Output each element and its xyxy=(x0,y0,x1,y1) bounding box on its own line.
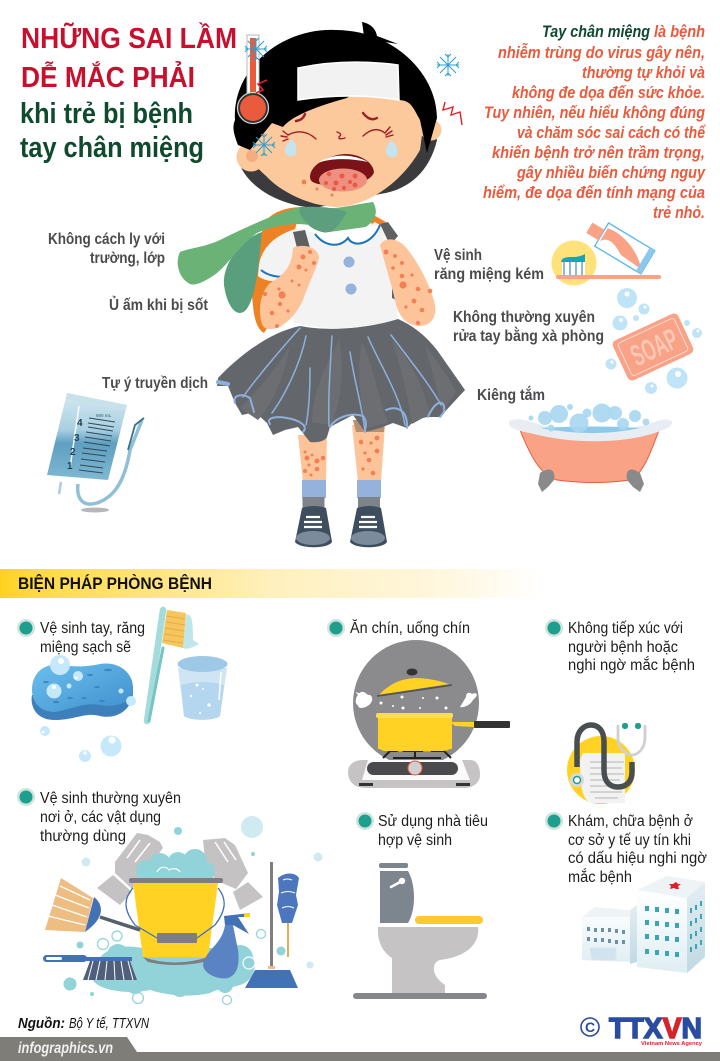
title xyxy=(20,21,237,164)
bullet text: cooked food: Ăn chín, uống chín xyxy=(350,620,470,637)
scarf tail xyxy=(224,232,262,313)
right ear xyxy=(420,120,442,140)
leg rash spots xyxy=(303,436,379,476)
intro paragraph: Tay chân miệng xyxy=(542,23,650,41)
bullet text: toilet xyxy=(356,812,488,849)
arm rash spots xyxy=(263,250,432,328)
bucket xyxy=(133,883,218,957)
TTXVN logo: Vietnam News Agency xyxy=(641,1041,703,1047)
intro paragraph: là bệnh xyxy=(654,23,705,41)
icon: stethoscope and record xyxy=(567,723,645,804)
shirt buttons xyxy=(344,256,356,294)
icon: water glass xyxy=(178,656,228,720)
bullet text: avoid contact: người bệnh hoặc xyxy=(568,639,678,656)
icon: cooking pot on stove xyxy=(348,640,510,788)
skirt xyxy=(217,319,465,442)
footer bar: infographics.vn xyxy=(18,1040,113,1057)
bullet text: cleaning: Vệ sinh thường xuyên xyxy=(40,790,181,807)
icon: IV drip bag: 3 xyxy=(74,433,80,444)
intro paragraph: trẻ nhỏ. xyxy=(653,204,705,222)
mistake labels right xyxy=(434,247,604,404)
icon: IV drip bag: 2 xyxy=(70,447,76,458)
bullet text: cleaning xyxy=(17,788,181,845)
bullet text: cleaning: nơi ở, các vật dụng xyxy=(40,809,161,826)
icon: IV drip bag: 1 xyxy=(67,461,73,472)
bullet text: medical care: Khám, chữa bệnh ở xyxy=(568,813,693,830)
icon: IV drip bag: 500 mL xyxy=(96,413,112,418)
foam highlights xyxy=(157,867,180,872)
mistake labels left: Ủ ấm khi bị sốt xyxy=(109,296,208,314)
bullet text: hygiene: miệng sạch sẽ xyxy=(40,639,131,656)
socks xyxy=(302,480,381,511)
skirt pleats and hem xyxy=(218,328,444,432)
mistake labels left: trường, lớp xyxy=(90,250,165,267)
shirt xyxy=(258,222,410,328)
footer bar xyxy=(0,1037,720,1061)
mistake labels right: Vệ sinh xyxy=(434,247,482,264)
bullet text: toilet: Sử dụng nhà tiêu xyxy=(378,813,488,830)
tears xyxy=(285,139,398,157)
TTXVN logo: TTXVN xyxy=(609,1013,702,1045)
mistake labels left: Không cách ly với xyxy=(48,231,165,248)
source note: Nguồn: xyxy=(18,1015,65,1032)
title: DỄ MẮC PHẢI xyxy=(21,60,195,94)
bullet text: toilet: hợp vệ sinh xyxy=(378,832,452,849)
broom xyxy=(45,878,140,932)
bucket rim and base xyxy=(129,878,223,965)
right arm xyxy=(380,239,435,326)
left arm xyxy=(260,246,319,329)
icon: sponge xyxy=(32,655,136,762)
icon: toothbrush xyxy=(147,610,199,721)
dustpan and pole xyxy=(245,862,298,988)
icon: IV drip bag xyxy=(47,393,144,512)
icon: hospital xyxy=(582,876,705,973)
bullet text: medical care: mắc bệnh xyxy=(568,869,632,886)
mistake labels right: rửa tay bằng xà phòng xyxy=(453,327,604,345)
decorative bubbles xyxy=(64,816,322,996)
scrub brush xyxy=(43,955,137,980)
section heading band xyxy=(0,569,540,598)
bullet text: medical care xyxy=(545,812,707,886)
mistake labels right: Kiêng tắm xyxy=(477,386,545,404)
rubber gloves xyxy=(97,833,263,910)
mouth xyxy=(310,154,374,192)
backpack xyxy=(252,207,386,333)
TTXVN logo: C xyxy=(585,1019,595,1035)
face xyxy=(245,90,424,207)
bullet text: cleaning: thường dùng xyxy=(40,828,126,845)
title: khi trẻ bị bệnh xyxy=(20,98,193,130)
bullet text: medical care: cơ sở y tế uy tín khi xyxy=(568,832,691,849)
thermometer xyxy=(238,35,268,124)
bottom foam xyxy=(91,944,255,997)
foam rings xyxy=(98,930,266,1004)
icon: zigzag near thermometer xyxy=(256,80,267,93)
source note: Bộ Y tế, TTXVN xyxy=(69,1015,149,1032)
mistake labels left xyxy=(48,231,208,392)
mistake labels right: Không thường xuyên xyxy=(453,309,595,326)
bullet text: avoid contact: nghi ngờ mắc bệnh xyxy=(568,657,695,674)
intro paragraph xyxy=(483,23,706,222)
scarf xyxy=(178,202,376,285)
icon: soap with bubbles: SOAP xyxy=(626,323,683,373)
spray bottle xyxy=(203,913,250,978)
duster xyxy=(277,874,299,957)
sleeve band xyxy=(261,270,288,277)
icon: IV drip bag: 4 xyxy=(77,418,83,429)
icon: red zigzag xyxy=(443,102,462,125)
backpack straps xyxy=(293,222,398,300)
title: NHỮNG SAI LẦM xyxy=(21,21,237,55)
intro paragraph: thường tự khỏi và xyxy=(582,64,705,82)
bullet text: avoid contact: Không tiếp xúc với xyxy=(568,620,683,637)
forehead cooling patch xyxy=(298,62,399,100)
lower hair xyxy=(240,100,437,208)
bullet text: hygiene: Vệ sinh tay, răng xyxy=(40,620,145,637)
title: tay chân miệng xyxy=(20,132,204,164)
bullet text: avoid contact xyxy=(545,619,695,674)
section heading band: BIỆN PHÁP PHÒNG BỆNH xyxy=(18,574,212,593)
bullet text: hygiene xyxy=(17,619,145,656)
icon: snowflakes xyxy=(245,38,459,156)
foam top xyxy=(136,849,215,882)
tongue spots xyxy=(302,172,357,196)
skirt folds xyxy=(240,340,456,428)
icon: toothbrush and toothpaste xyxy=(552,216,661,286)
icon: soap with bubbles xyxy=(606,288,702,394)
left ear xyxy=(236,142,266,172)
legs xyxy=(298,420,385,482)
shoes xyxy=(295,506,387,547)
mistake labels left: Tự ý truyền dịch xyxy=(102,375,208,392)
icon: cleaning bucket set xyxy=(43,816,322,1004)
icon: toilet xyxy=(353,863,487,999)
collar xyxy=(315,225,380,245)
source note xyxy=(18,1015,149,1032)
bucket handle xyxy=(126,888,224,938)
mistake labels right: răng miệng kém xyxy=(434,266,544,283)
icon: bathtub xyxy=(509,404,672,492)
bullet text: medical care: có dấu hiệu nghi ngờ xyxy=(568,850,707,867)
eyes and brows xyxy=(281,113,393,141)
illustration: sick girl xyxy=(178,22,465,547)
hair front xyxy=(233,22,437,153)
